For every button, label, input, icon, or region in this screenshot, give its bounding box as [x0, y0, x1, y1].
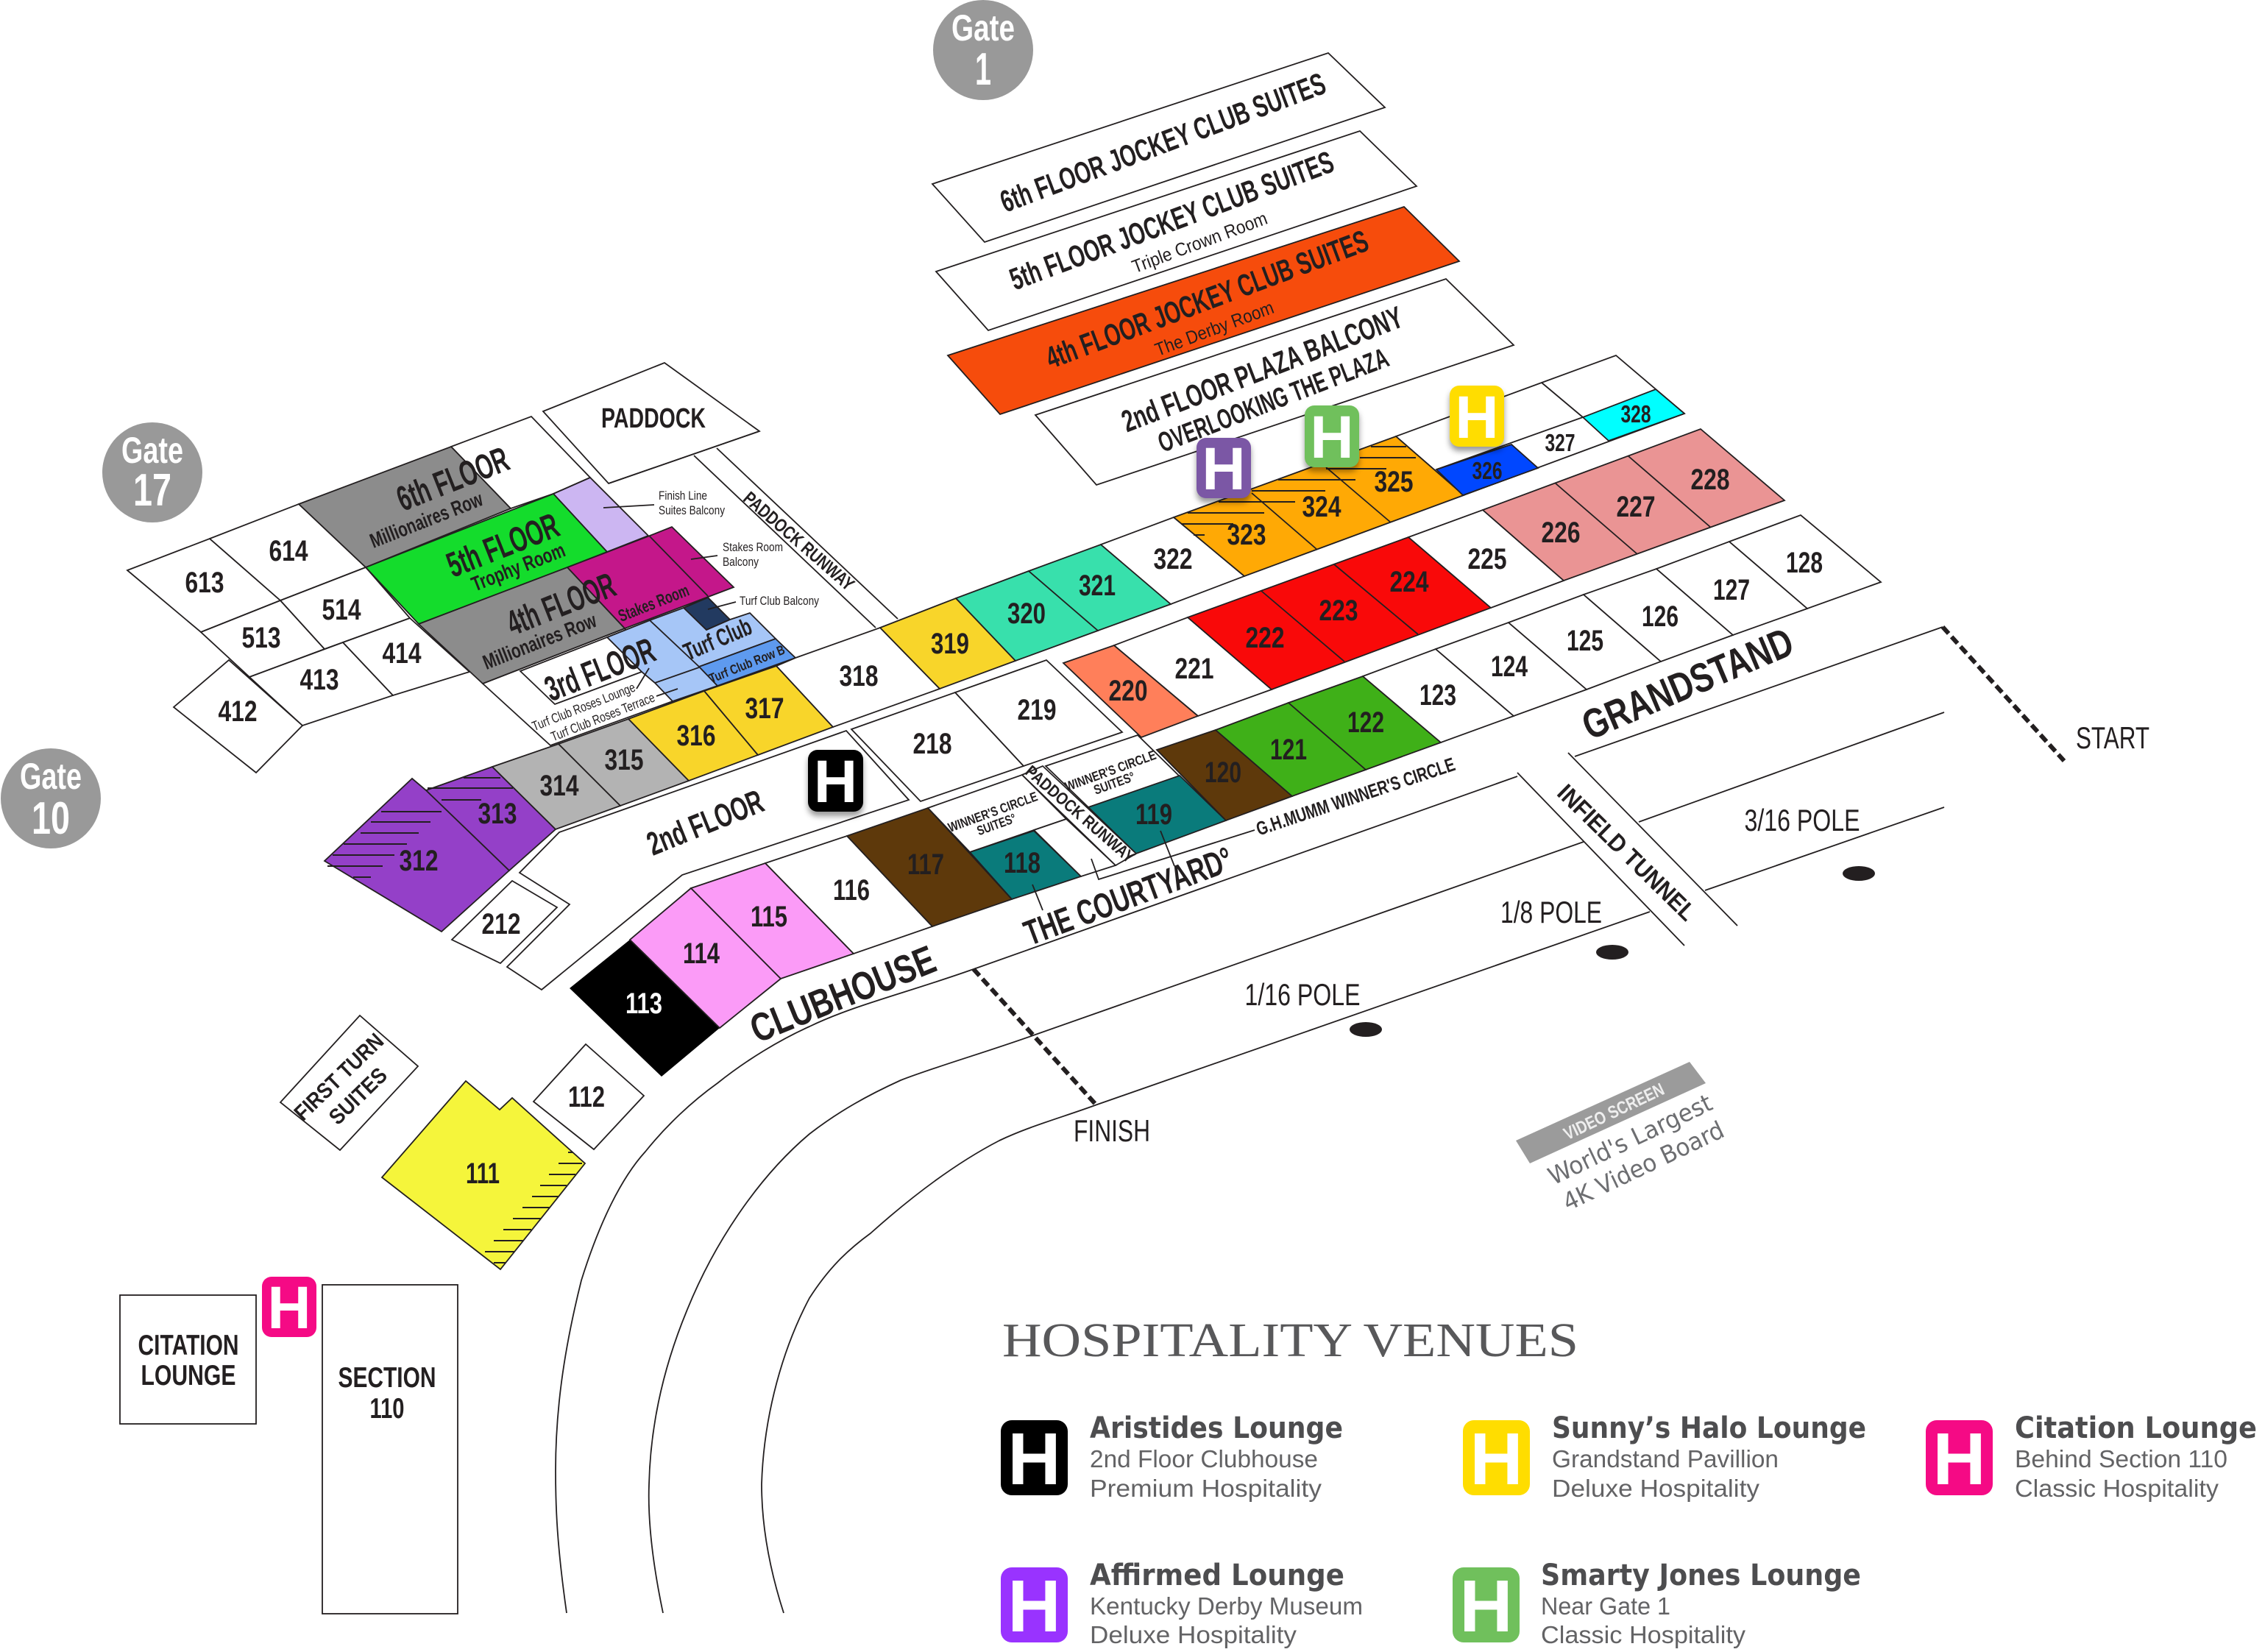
- 6th floor label: [366, 440, 514, 553]
- finish line suites balcony label: Suites Balcony: [659, 503, 725, 517]
- section 118: 118: [1004, 847, 1041, 879]
- section 219: 219: [1017, 694, 1057, 726]
- grandstand track lines: [1575, 627, 1944, 890]
- sections 323 324 325: 323: [1227, 519, 1266, 551]
- section 111: [382, 1081, 585, 1269]
- section 614: [210, 504, 366, 600]
- 5th floor jockey club suites: 5th FLOOR JOCKEY CLUB SUITES: [1005, 144, 1339, 297]
- 6th floor label: 6th FLOOR: [391, 440, 514, 519]
- finish line suites balcony label: Finish Line: [659, 489, 707, 503]
- 4th floor jockey club suites: The Derby Room: [1152, 297, 1277, 361]
- finish line suites balcony: [553, 478, 648, 552]
- section 312: 312: [399, 845, 439, 877]
- gates: [1, 0, 1033, 848]
- turf club roses lounge label: Turf Club Roses Lounge: [530, 680, 637, 734]
- grandstand label: GRANDSTAND: [1575, 618, 1800, 748]
- section 121: [1216, 703, 1366, 796]
- gh mumm winners circle label: G.H.MUMM WINNER'S CIRCLE: [1253, 753, 1458, 840]
- section 312: [325, 779, 509, 932]
- map hospitality markers: [262, 384, 1504, 1341]
- sections 222 223 224: [1188, 537, 1491, 689]
- 3/16 pole label: 3/16 POLE: [1744, 803, 1860, 837]
- stakes room balcony label: Stakes Room: [723, 540, 783, 554]
- 5th floor jockey club suites: Triple Crown Room: [1130, 208, 1270, 277]
- section 128: 128: [1786, 547, 1823, 579]
- section 321: 321: [1079, 570, 1116, 602]
- track rail 1: [556, 776, 1517, 1613]
- turf club row b label: Turf Club Row B: [707, 642, 787, 686]
- 5th floor label: [442, 506, 568, 596]
- 2nd floor plaza balcony: 2nd FLOOR PLAZA BALCONY: [1117, 299, 1408, 439]
- gate 1: Gate: [951, 7, 1015, 49]
- legend: aristides lounge: 2nd Floor Clubhouse: [1090, 1445, 1318, 1472]
- sections 323 324 325: [1174, 436, 1464, 576]
- section 220: 220: [1108, 675, 1148, 707]
- section 115: [691, 863, 854, 979]
- turf club row b: [699, 639, 795, 686]
- section 120: [1157, 730, 1292, 820]
- 5th floor trophy room: [366, 494, 607, 624]
- video screen: [1516, 1062, 1729, 1216]
- 6th floor jockey club suites: [932, 53, 1385, 242]
- finish line: [974, 969, 1097, 1106]
- clubhouse label: CLUBHOUSE: [744, 937, 942, 1052]
- legend: affirmed lounge: Kentucky Derby Museum: [1090, 1592, 1363, 1620]
- panel: hospitality venues legend: [1001, 1314, 2257, 1648]
- section 514: 514: [322, 594, 361, 626]
- section 122: 122: [1347, 706, 1384, 739]
- section 314: 314: [540, 770, 579, 802]
- section 320: 320: [1007, 598, 1046, 630]
- video screen bar: VIDEO SCREEN: [1561, 1080, 1667, 1144]
- winners circle suites right: [1046, 735, 1180, 807]
- legend: smarty jones lounge: H: [1459, 1565, 1513, 1648]
- section 220: [1063, 645, 1198, 737]
- legend title: HOSPITALITY VENUES: [1002, 1314, 1578, 1367]
- section 124: [1436, 623, 1587, 716]
- legend: citation lounge: Classic Hospitality: [2015, 1475, 2219, 1502]
- first turn suites: FIRST TURN: [290, 1029, 389, 1126]
- section 112: [534, 1044, 644, 1149]
- white band behind 326: [1396, 355, 1684, 495]
- infield tunnel label: INFIELD TUNNEL: [1552, 779, 1701, 926]
- section 114: [630, 888, 781, 1028]
- marker: affirmed purple: H: [1202, 436, 1246, 503]
- turf club roses terrace label: Turf Club Roses Terrace: [549, 690, 657, 744]
- section 114: 114: [683, 937, 720, 970]
- section 119: 119: [1135, 798, 1172, 831]
- section 322: 322: [1154, 543, 1192, 575]
- section 315: [559, 719, 689, 806]
- section 218: 218: [912, 728, 952, 760]
- section 318: 318: [839, 660, 879, 692]
- section 513: [201, 600, 325, 677]
- gate 17: 17: [133, 465, 171, 516]
- section 327: 327: [1545, 429, 1575, 456]
- panel: second level sections: [452, 429, 1784, 990]
- winners circle suites left: [928, 775, 1066, 852]
- section 219: [955, 660, 1122, 766]
- section 319: 319: [931, 628, 969, 660]
- winners circle suites left: SUITES°: [975, 811, 1018, 838]
- section 125: 125: [1567, 625, 1603, 657]
- 2nd floor plaza balcony: [1035, 279, 1514, 485]
- section 113: 113: [625, 988, 662, 1020]
- section 212: [452, 881, 557, 963]
- section 413: 413: [300, 664, 338, 696]
- 5th floor label: Trophy Room: [468, 539, 568, 596]
- 3rd floor box: [520, 637, 642, 704]
- legend: affirmed lounge: H: [1007, 1565, 1061, 1648]
- legend: affirmed lounge: Deluxe Hospitality: [1090, 1621, 1297, 1648]
- section 322: [1101, 517, 1244, 604]
- section 120: 120: [1205, 756, 1241, 789]
- section 122: [1289, 676, 1441, 770]
- section 614: 614: [269, 535, 308, 567]
- stakes room: [567, 527, 734, 628]
- paddock runway upper: [609, 431, 898, 628]
- pole marker 1/8: [1596, 945, 1628, 960]
- section 414: [343, 618, 469, 695]
- section 613: [127, 539, 280, 632]
- gate 17: [102, 422, 202, 522]
- track rail 3: [762, 912, 1650, 1613]
- section 315: 315: [605, 744, 643, 776]
- panel: jockey club suites: [932, 53, 1514, 485]
- turf club light blue: [607, 608, 776, 701]
- sections 222 223 224: 223: [1319, 595, 1358, 627]
- legend: sunnys halo lounge: [1463, 1411, 1866, 1502]
- paddock: PADDOCK: [601, 403, 706, 434]
- section 125: [1509, 595, 1661, 689]
- legend: aristides lounge: Premium Hospitality: [1090, 1475, 1322, 1502]
- section 413: [249, 642, 393, 726]
- track labels: [744, 618, 2149, 1148]
- winners circle suites left: WINNER'S CIRCLE: [946, 789, 1040, 835]
- legend: smarty jones lounge: Smarty Jones Lounge: [1541, 1559, 1861, 1592]
- section 126: [1584, 569, 1733, 662]
- legend: smarty jones lounge: Near Gate 1: [1541, 1592, 1670, 1620]
- legend: aristides lounge: Aristides Lounge: [1090, 1411, 1343, 1445]
- track rail 2: [649, 842, 1584, 1613]
- section 112: 112: [568, 1081, 605, 1113]
- finish label: FINISH: [1074, 1113, 1150, 1148]
- section 127: 127: [1713, 574, 1750, 606]
- infield tunnel edges: [1517, 753, 1737, 946]
- paddock runway lower: PADDOCK RUNWAY: [1021, 762, 1138, 867]
- citation lounge: LOUNGE: [141, 1360, 235, 1392]
- courtyard boundary lines: [1091, 830, 1255, 879]
- section 412: 412: [218, 695, 258, 728]
- legend: sunnys halo lounge: Grandstand Pavillion: [1552, 1445, 1779, 1472]
- section 316: 316: [677, 720, 715, 752]
- section 328: 328: [1620, 400, 1651, 428]
- marker: citation pink: H: [267, 1275, 311, 1341]
- turf club balcony label: Turf Club Balcony: [740, 594, 819, 608]
- section 110: 110: [369, 1393, 405, 1425]
- section 327: [1436, 383, 1583, 469]
- section 326: 326: [1472, 457, 1503, 484]
- stakes room balcony label: Balcony: [723, 555, 759, 569]
- panel: third level sections: [325, 355, 1684, 932]
- section 321: [1029, 545, 1171, 631]
- 1/8 pole label: 1/8 POLE: [1500, 895, 1602, 929]
- 5th floor jockey club suites: [936, 131, 1417, 330]
- section 116: [765, 836, 932, 954]
- 5th floor label: 5th FLOOR: [442, 506, 564, 585]
- gate 10: 10: [32, 793, 70, 844]
- section 328: [1583, 389, 1684, 441]
- legend: affirmed lounge: [1001, 1559, 1363, 1648]
- the courtyard label: THE COURTYARD°: [1019, 840, 1238, 954]
- panel: first level sections: [120, 515, 1881, 1614]
- gate 1: [933, 0, 1033, 100]
- 2nd floor clubhouse: [507, 731, 909, 990]
- gate 10: Gate: [20, 756, 82, 797]
- legend: sunnys halo lounge: Sunny’s Halo Lounge: [1552, 1411, 1866, 1445]
- sections 323 324 325: 324: [1302, 491, 1341, 523]
- first turn suites: [280, 1015, 418, 1150]
- 4th floor label: [480, 566, 621, 674]
- gate 1: 1: [975, 44, 991, 95]
- section 316: [628, 691, 758, 781]
- section 123: [1363, 649, 1514, 742]
- 4th floor label: 4th FLOOR: [501, 566, 621, 644]
- 4th floor millionaires row: [419, 567, 625, 684]
- 2nd floor plaza balcony: OVERLOOKING THE PLAZA: [1154, 342, 1393, 459]
- section 124: 124: [1491, 650, 1528, 683]
- worlds largest caption: World's Largest: [1544, 1088, 1717, 1191]
- section 317: 317: [745, 692, 784, 725]
- section 110: [322, 1285, 458, 1614]
- small white courtyard bay: [1034, 819, 1116, 876]
- section 115: 115: [751, 901, 787, 933]
- marker: sunnys halo yellow: H: [1455, 384, 1499, 451]
- balcony leaders: [603, 505, 736, 696]
- sections 226 227 228: 228: [1691, 464, 1729, 496]
- sections 222 223 224: 222: [1245, 622, 1285, 654]
- citation lounge: CITATION: [138, 1330, 238, 1361]
- section 116: 116: [833, 874, 870, 907]
- section 319: [880, 598, 1015, 689]
- track and infield: [556, 627, 2064, 1613]
- section 221: [1114, 617, 1272, 716]
- citation lounge: [120, 1295, 256, 1424]
- 4th floor label: Millionaires Row: [480, 609, 600, 674]
- sections 323 324 325: 325: [1375, 466, 1413, 498]
- panel: clubhouse upper floors: [127, 363, 898, 773]
- section 128: [1729, 515, 1881, 609]
- section 225: 225: [1467, 543, 1507, 575]
- marker: aristides black: H: [814, 748, 857, 815]
- section 314: [492, 744, 620, 829]
- legend: sunnys halo lounge: H: [1470, 1418, 1523, 1500]
- legend: citation lounge: Behind Section 110: [2015, 1445, 2227, 1472]
- section 218: [851, 692, 1024, 801]
- 2nd floor clubhouse: 2nd FLOOR: [642, 782, 769, 862]
- legend: sunnys halo lounge: Deluxe Hospitality: [1552, 1475, 1760, 1502]
- pole marker 1/16: [1350, 1022, 1382, 1037]
- winners circle suites right: SUITES°: [1091, 769, 1137, 798]
- section 117: [847, 808, 1012, 926]
- section 110: SECTION: [338, 1362, 436, 1394]
- paddock: [543, 363, 759, 483]
- turf club label: Turf Club: [679, 612, 756, 665]
- sections 226 227 228: 226: [1541, 517, 1581, 549]
- section 414: 414: [383, 637, 422, 670]
- finish line suites balcony label: [659, 489, 725, 517]
- section 119: [1088, 776, 1226, 866]
- first turn suites: SUITES: [325, 1063, 392, 1130]
- section 221: 221: [1174, 653, 1214, 685]
- legend: smarty jones lounge: Classic Hospitality: [1541, 1621, 1746, 1648]
- stakes room balcony label: [723, 540, 783, 569]
- section 121: 121: [1270, 734, 1307, 766]
- legend: citation lounge: H: [1932, 1418, 1986, 1500]
- section 513: 513: [241, 622, 281, 654]
- section 117: 117: [907, 848, 944, 881]
- worlds largest caption: 4K Video Board: [1558, 1116, 1729, 1216]
- section 127: [1656, 542, 1807, 635]
- section 317: [704, 666, 833, 755]
- stakes room label: Stakes Room: [615, 581, 692, 625]
- sections 226 227 228: [1483, 429, 1784, 581]
- section 212: 212: [481, 908, 521, 940]
- section 318: [776, 628, 940, 727]
- 4th floor jockey club suites: 4th FLOOR JOCKEY CLUB SUITES: [1041, 223, 1373, 375]
- section 113: [570, 940, 720, 1077]
- winners circle suites right: WINNER'S CIRCLE: [1063, 748, 1158, 794]
- section 412: [174, 660, 302, 773]
- section 313: 313: [478, 798, 517, 830]
- start line: [1943, 627, 2064, 761]
- navy turf club balcony: [684, 598, 730, 630]
- section 126: 126: [1642, 600, 1679, 633]
- 4th floor jockey club suites: [948, 207, 1459, 414]
- video screen bar: [1516, 1062, 1706, 1163]
- section 320: [956, 571, 1098, 661]
- section 514: [280, 567, 410, 649]
- legend: aristides lounge: H: [1007, 1418, 1061, 1500]
- 6th floor white block: [451, 416, 590, 508]
- legend: affirmed lounge: Affirmed Lounge: [1090, 1559, 1344, 1592]
- section 225: [1408, 510, 1564, 608]
- section 111: 111: [466, 1158, 500, 1190]
- section 313: [426, 767, 556, 871]
- 1/16 pole label: 1/16 POLE: [1245, 977, 1360, 1012]
- 6th floor millionaires row: [299, 447, 511, 567]
- marker: smarty jones green: H: [1310, 404, 1354, 471]
- section 613: 613: [185, 567, 224, 599]
- pole marker 3/16: [1843, 866, 1875, 881]
- 6th floor label: Millionaires Row: [366, 487, 486, 553]
- 6th floor jockey club suites: 6th FLOOR JOCKEY CLUB SUITES: [996, 66, 1330, 219]
- legend: smarty jones lounge: [1453, 1559, 1861, 1648]
- section 326: [1436, 444, 1538, 495]
- section 123: 123: [1419, 679, 1456, 712]
- 3rd floor label: 3rd FLOOR: [539, 631, 661, 709]
- legend: citation lounge: [1926, 1411, 2257, 1502]
- sections 226 227 228: 227: [1616, 491, 1656, 523]
- gate 17: Gate: [121, 430, 183, 471]
- sections 222 223 224: 224: [1389, 566, 1429, 598]
- gate 10: [1, 748, 101, 848]
- white band outline: [483, 628, 673, 745]
- section 118: [970, 831, 1081, 910]
- start label: START: [2076, 720, 2149, 755]
- paddock runway upper: PADDOCK RUNWAY: [739, 488, 858, 595]
- legend: aristides lounge: [1001, 1411, 1343, 1502]
